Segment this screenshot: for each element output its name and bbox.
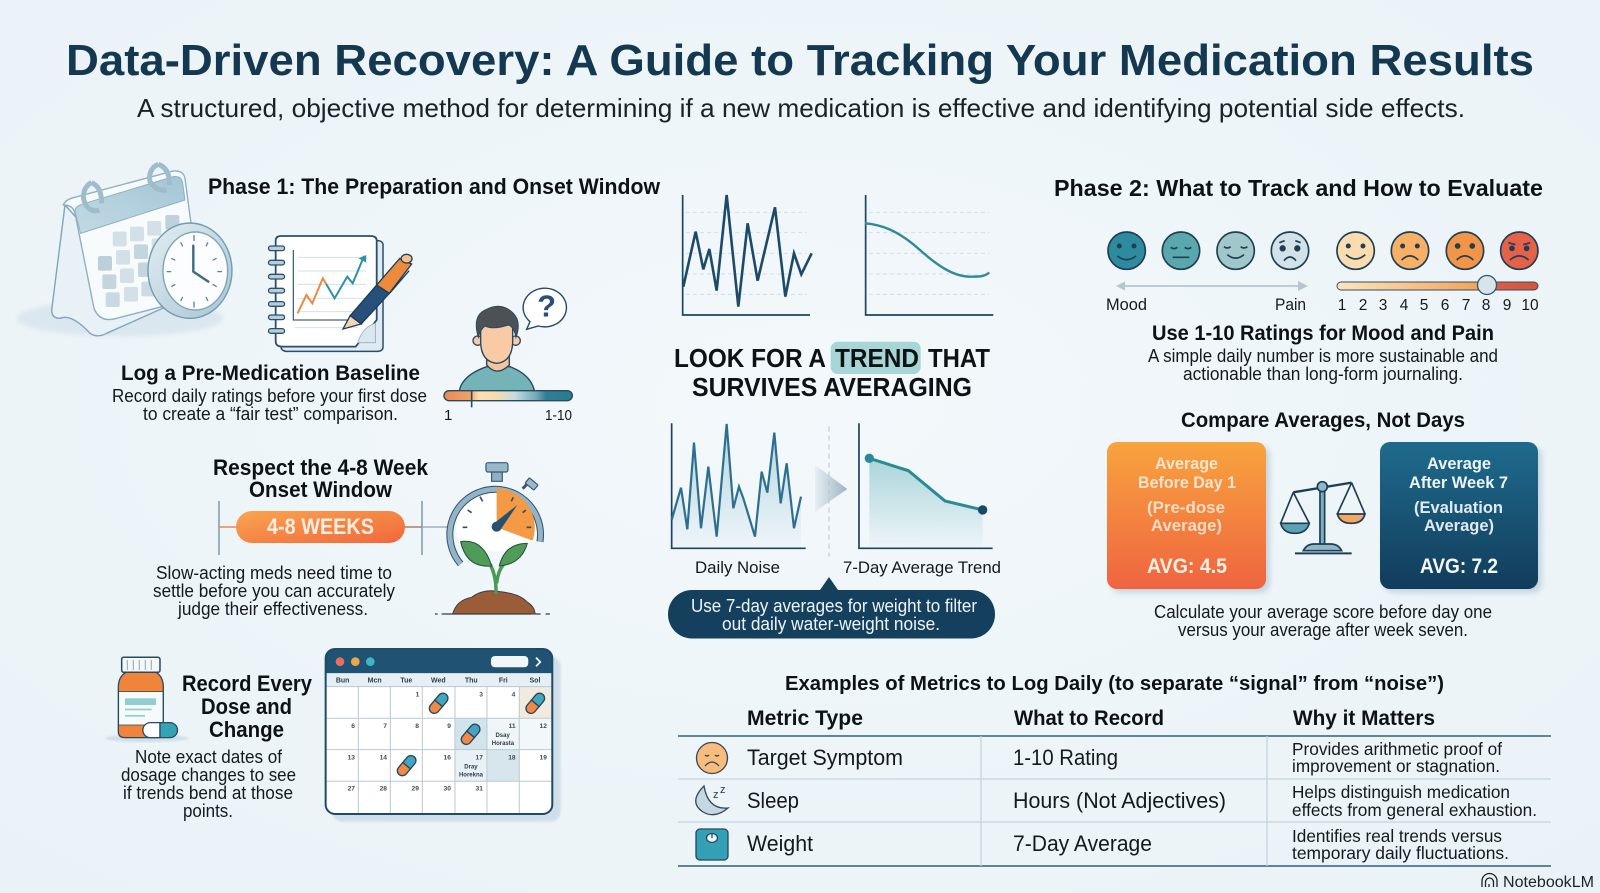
icon: person with question and rating bar: 1 <box>444 407 452 424</box>
panel: phase 1 preparation and onset window <box>17 164 660 822</box>
pain slider 1-10: 10 <box>1521 297 1539 314</box>
text: record every dose and change: points. <box>183 801 233 821</box>
row: target symptom: Target Symptom <box>747 745 903 770</box>
text: record every dose and change: if trends bend at those <box>123 783 293 803</box>
text: slow-acting meds: settle before you can accurately <box>153 581 395 601</box>
calendar: dose log month view: Sol <box>530 678 540 685</box>
panel: metrics table <box>678 673 1551 866</box>
row: sleep <box>696 782 1537 820</box>
icon: stopwatch and sprouting plant <box>435 463 550 614</box>
text: log a pre-medication baseline <box>112 362 427 424</box>
icon: medicine bottle and capsule <box>105 657 188 742</box>
text: use 1-10 ratings: A simple daily number is more sustainable and <box>1148 346 1498 366</box>
icon: pill Wed <box>427 691 450 715</box>
row: target symptom: 1-10 Rating <box>1013 745 1118 770</box>
pain slider 1-10: 1 <box>1338 297 1346 314</box>
pain slider 1-10: 6 <box>1441 297 1449 314</box>
icon: balance scale <box>1281 482 1365 553</box>
title: Data-Driven Recovery: A Guide to Tracking Your Medication Results <box>66 36 1534 85</box>
chart labels <box>695 558 1001 577</box>
pain slider 1-10: 8 <box>1482 297 1490 314</box>
panel: trend centre column <box>668 195 1001 638</box>
text: record every dose and change: Record Every <box>182 671 313 696</box>
calendar: dose log month view: 31 <box>476 786 483 793</box>
row: target symptom <box>696 739 1502 776</box>
icon: notebook with rising chart and pen <box>269 236 412 351</box>
pain slider 1-10 <box>1337 276 1539 314</box>
text: slow-acting meds: Slow-acting meds need time to <box>156 563 392 583</box>
pain slider 1-10: 3 <box>1379 297 1387 314</box>
calendar: dose log month view: Mcn <box>368 678 382 685</box>
pain slider 1-10: 2 <box>1359 297 1367 314</box>
pain slider 1-10: 7 <box>1462 297 1470 314</box>
calendar: dose log month view: Dsay <box>495 733 510 739</box>
callout: use 7-day averages: out daily water-weight noise. <box>722 614 940 634</box>
card: average after week 7: AVG: 7.2 <box>1420 555 1498 578</box>
row: target symptom: Provides arithmetic proof of <box>1292 739 1502 759</box>
card: average before day 1: Before Day 1 <box>1138 473 1236 492</box>
icon: sad face <box>696 742 728 774</box>
calendar: dose log month view <box>326 649 561 822</box>
calendar: dose log month view: 4 <box>512 692 516 699</box>
card: average before day 1 <box>1107 442 1270 593</box>
calendar: dose log month view: Tue <box>400 678 412 685</box>
card: average before day 1: Average) <box>1151 516 1222 535</box>
text: respect the onset window <box>213 455 429 502</box>
calendar: dose log month view: 18 <box>508 754 516 761</box>
calendar: dose log month view: 28 <box>380 786 387 793</box>
calendar: dose log month view: 14 <box>380 754 387 761</box>
mood to pain arrow: Pain <box>1275 296 1306 314</box>
calendar: dose log month view: 17 <box>476 754 483 761</box>
row: weight <box>696 826 1509 863</box>
card: average after week 7 <box>1380 442 1542 593</box>
row: weight: Identifies real trends versus <box>1292 826 1502 846</box>
heading: phase 2: Phase 2: What to Track and How to Evaluate <box>1054 175 1543 201</box>
mood faces row <box>1108 232 1309 269</box>
arrow: noise to trend <box>815 427 847 557</box>
calendar: dose log month view: 6 <box>351 723 355 730</box>
calendar: dose log month view: Dray <box>464 765 478 771</box>
chart: smooth curve top <box>865 195 993 315</box>
icon: desk calendar with clock <box>17 164 232 337</box>
icon: pill Tue <box>395 753 418 778</box>
text: use 1-10 ratings: actionable than long-form journaling. <box>1183 364 1463 384</box>
calendar: dose log month view: Thu <box>465 678 478 685</box>
table rules <box>678 736 1551 866</box>
timeline: 4-8 weeks pill <box>219 501 447 555</box>
calendar: dose log month view: Fri <box>499 678 508 685</box>
card: average before day 1: Average <box>1155 454 1218 473</box>
text: log a pre-medication baseline: to create a “fair test” comparison. <box>143 404 398 424</box>
row: sleep: Helps distinguish medication <box>1292 782 1510 802</box>
timeline: 4-8 weeks pill: 4-8 WEEKS <box>267 514 374 539</box>
calendar: dose log month view: 3 <box>479 692 483 699</box>
table header row: What to Record <box>1014 707 1164 730</box>
row: weight: temporary daily fluctuations. <box>1292 843 1509 863</box>
chart: noisy line top <box>683 195 812 315</box>
icon: person with question and rating bar: ? <box>537 290 556 324</box>
pain slider 1-10: 5 <box>1420 297 1428 314</box>
chart: daily noise <box>672 423 806 548</box>
icon: moon with zzz: z <box>720 784 726 796</box>
icon: pill Sat <box>524 691 547 715</box>
heading: compare averages: Compare Averages, Not Days <box>1181 409 1465 432</box>
text: log a pre-medication baseline: Log a Pre-Medication Baseline <box>121 362 420 385</box>
calendar: dose log month view: 13 <box>348 754 355 761</box>
calendar: dose log month view: 9 <box>447 723 451 730</box>
chart: 7-day average trend <box>859 423 993 548</box>
text: log a pre-medication baseline: Record daily ratings before your first dose <box>112 386 427 406</box>
watermark: NotebookLM: NotebookLM <box>1503 874 1594 891</box>
calendar: dose log month view: 11 <box>509 723 516 730</box>
calendar: dose log month view: 8 <box>415 723 419 730</box>
callout: use 7-day averages <box>668 577 995 638</box>
table header row: Why it Matters <box>1293 707 1435 730</box>
heading: phase 1: Phase 1: The Preparation and Onset Window <box>208 174 660 199</box>
text: record every dose and change: dosage changes to see <box>121 765 296 785</box>
text: respect the onset window: Onset Window <box>249 477 393 502</box>
text: respect the onset window: Respect the 4-8 Week <box>213 455 429 480</box>
card: average after week 7: After Week 7 <box>1409 473 1508 492</box>
calendar: dose log month view: 12 <box>540 723 547 730</box>
text: use 1-10 ratings <box>1148 321 1498 384</box>
calendar: dose log month view: Bun <box>336 678 349 685</box>
icon: pill Thu <box>459 722 482 746</box>
calendar: dose log month view: Horasta <box>492 741 515 747</box>
subtitle: A structured, objective method for determining if a new medication is effective and identifying potential side effects. <box>137 93 1465 123</box>
text: record every dose and change: Change <box>209 717 284 742</box>
row: sleep: Hours (Not Adjectives) <box>1013 788 1226 813</box>
icon: moon with zzz <box>696 784 728 815</box>
calendar: dose log month view: 29 <box>412 786 419 793</box>
icon: person with question and rating bar <box>444 288 572 424</box>
calendar: dose log month view: 30 <box>444 786 451 793</box>
icon: moon with zzz: z <box>713 789 718 801</box>
heading: look for a trend that survives averaging: THAT <box>928 345 990 373</box>
card: average before day 1: AVG: 4.5 <box>1147 555 1227 578</box>
calendar: dose log month view: Horekna <box>459 773 484 779</box>
heading: look for a trend that survives averaging <box>674 342 990 402</box>
pain faces row <box>1337 232 1538 269</box>
row: sleep: effects from general exhaustion. <box>1292 800 1537 820</box>
text: record every dose and change: Dose and <box>201 694 292 719</box>
text: calculate your average: versus your average after week seven. <box>1178 620 1468 640</box>
pain slider 1-10: 4 <box>1400 297 1409 314</box>
chart labels: Daily Noise <box>695 558 780 577</box>
text: calculate your average <box>1154 602 1492 640</box>
text: slow-acting meds: judge their effectiveness. <box>177 599 368 619</box>
mood to pain arrow <box>1106 281 1308 314</box>
icon: bathroom scale <box>696 829 728 860</box>
table header row: Metric Type <box>747 707 863 730</box>
heading: look for a trend that survives averaging: SURVIVES AVERAGING <box>692 374 972 402</box>
heading: examples of metrics: Examples of Metrics to Log Daily (to separate “signal” from “noise”) <box>785 673 1444 695</box>
calendar: dose log month view: 7 <box>383 723 387 730</box>
calendar: dose log month view: 1 <box>416 692 420 699</box>
text: use 1-10 ratings: Use 1-10 Ratings for Mood and Pain <box>1152 321 1494 345</box>
panel: phase 2 what to track <box>1054 175 1543 640</box>
row: sleep: Sleep <box>747 788 799 813</box>
row: weight: 7-Day Average <box>1013 831 1152 856</box>
pain slider 1-10: 9 <box>1503 297 1511 314</box>
card: average after week 7: Average <box>1427 454 1491 473</box>
calendar: dose log month view: 19 <box>540 754 547 761</box>
table header row <box>747 707 1435 730</box>
row: target symptom: improvement or stagnation. <box>1292 756 1500 776</box>
callout: use 7-day averages: Use 7-day averages for weight to filter <box>691 596 977 616</box>
card: average before day 1: (Pre-dose <box>1147 498 1225 517</box>
row: weight: Weight <box>747 831 813 856</box>
calendar: dose log month view: Wed <box>431 678 446 685</box>
heading: look for a trend that survives averaging: LOOK FOR A <box>674 345 826 373</box>
chart labels: 7-Day Average Trend <box>843 558 1001 577</box>
text: record every dose and change <box>121 671 313 821</box>
text: calculate your average: Calculate your average score before day one <box>1154 602 1492 622</box>
card: average after week 7: (Evaluation <box>1414 498 1503 517</box>
card: average after week 7: Average) <box>1424 516 1494 535</box>
calendar: dose log month view: 16 <box>444 754 451 761</box>
text: record every dose and change: Note exact dates of <box>135 747 283 767</box>
mood to pain arrow: Mood <box>1106 296 1147 314</box>
icon: person with question and rating bar: 1-10 <box>545 407 572 424</box>
text: slow-acting meds <box>153 563 395 619</box>
calendar: dose log month view: 27 <box>348 786 355 793</box>
heading: look for a trend that survives averaging: TREND <box>835 345 919 373</box>
